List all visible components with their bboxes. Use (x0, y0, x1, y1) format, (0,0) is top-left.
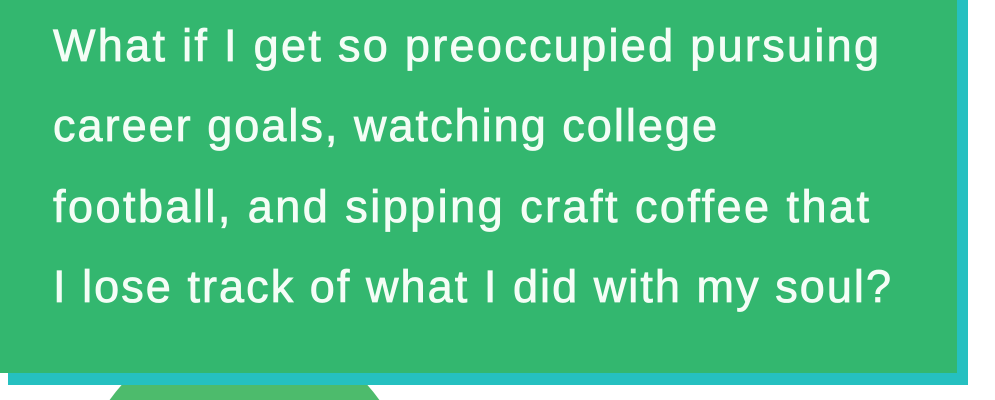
quote text: career goals, watching college (53, 100, 717, 151)
green circle behind card (110, 330, 379, 400)
quote text: football, and sipping craft coffee that (53, 181, 869, 232)
quote text: What if I get so preoccupied pursuing (53, 20, 879, 71)
quote text (53, 20, 891, 312)
quote text: I lose track of what I did with my soul? (53, 261, 891, 312)
